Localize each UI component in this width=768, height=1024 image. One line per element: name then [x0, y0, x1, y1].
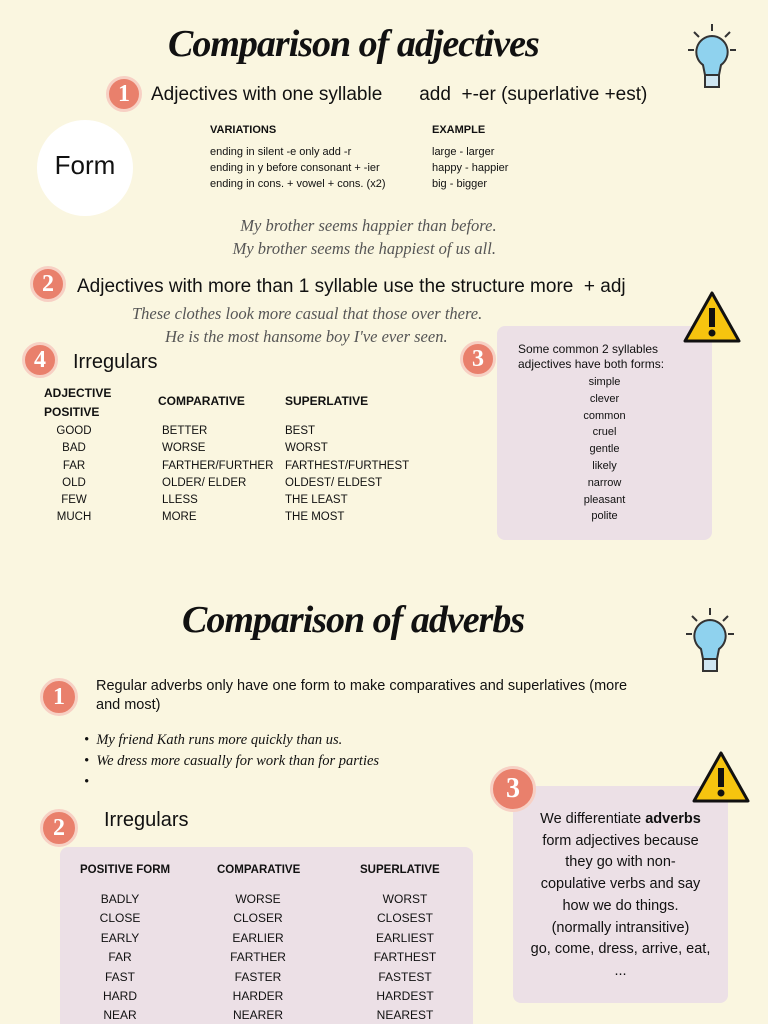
panel: adverbs vs adjectives: form adjectives because — [542, 833, 699, 849]
panel: irregular adverbs table: FARTHEST — [374, 950, 436, 964]
badge adverbs 2 — [40, 809, 78, 847]
table: irregular adjectives: WORSE — [162, 442, 205, 454]
icon: lightbulb 2 — [686, 608, 734, 672]
panel: irregular adverbs table: NEAR — [103, 1008, 137, 1022]
badge adverbs 1: 1 — [53, 684, 65, 710]
panel: irregular adverbs table: HARD — [103, 989, 137, 1003]
panel: two-syllable adjectives: likely — [592, 460, 617, 472]
table: irregular adjectives: THE MOST — [285, 511, 344, 523]
panel: two-syllable adjectives — [497, 326, 712, 540]
panel: irregular adverbs table: FASTER — [235, 970, 281, 984]
table: irregular adjectives — [44, 386, 409, 523]
panel: irregular adverbs table: CLOSE — [100, 911, 140, 925]
panel: irregular adverbs table: BADLY — [101, 892, 139, 906]
table: example: EXAMPLE — [432, 124, 485, 136]
panel: adverbs vs adjectives: how we do things. — [562, 898, 679, 914]
panel: two-syllable adjectives: Some common 2 syllables — [518, 342, 658, 356]
panel: adverbs vs adjectives — [513, 786, 728, 1003]
example list: adverbs — [84, 732, 379, 790]
badge 2 — [30, 266, 66, 302]
panel: two-syllable adjectives: pleasant — [584, 494, 625, 506]
table: irregular adjectives: GOOD — [56, 425, 92, 437]
badge adverbs 1 — [40, 678, 78, 716]
panel: adverbs vs adjectives: they go with non- — [565, 854, 676, 870]
badge 1 — [106, 76, 142, 112]
panel: adverbs vs adjectives: We differentiate adverbs — [540, 811, 701, 827]
table: variations: ending in y before consonant + -ier — [210, 162, 380, 174]
example list: adverbs: • My friend Kath runs more quickly than us. — [84, 732, 342, 748]
table: irregular adjectives: MORE — [162, 511, 196, 523]
panel: two-syllable adjectives: common — [583, 410, 626, 422]
example sentences 1: My brother seems the happiest of us all. — [233, 239, 496, 258]
badge 2: 2 — [42, 271, 54, 297]
table: irregular adjectives: OLD — [62, 477, 86, 489]
panel: two-syllable adjectives: adjectives have both forms: — [518, 357, 664, 371]
panel: irregular adverbs table: EARLIER — [232, 931, 284, 945]
badge 1: 1 — [118, 81, 130, 107]
panel: irregular adverbs table: POSITIVE FORM — [80, 864, 170, 876]
table: irregular adjectives: THE LEAST — [285, 494, 348, 506]
table: irregular adjectives: FEW — [61, 494, 87, 506]
panel: irregular adverbs table: FAST — [105, 970, 135, 984]
text: regular adverbs: Regular adverbs only have one form to make comparatives and superlatives (more — [96, 678, 627, 694]
panel: adverbs vs adjectives: (normally intransitive) — [552, 920, 689, 936]
panel: two-syllable adjectives: polite — [591, 510, 618, 522]
example list: adverbs: • — [84, 774, 89, 790]
panel: irregular adverbs table: HARDER — [233, 989, 283, 1003]
badge adverbs 3: 3 — [506, 773, 520, 804]
example sentences 2 — [132, 304, 482, 346]
example sentences 2: He is the most hansome boy I've ever seen. — [165, 327, 448, 346]
table: irregular adjectives: OLDER/ ELDER — [162, 477, 246, 489]
panel: irregular adverbs table: FASTEST — [378, 970, 432, 984]
badge adverbs 2: 2 — [53, 815, 65, 841]
panel: irregular adverbs table: FARTHER — [230, 950, 286, 964]
table: irregular adjectives: BETTER — [162, 425, 207, 437]
example sentences 1 — [232, 216, 497, 258]
table: irregular adjectives: MUCH — [57, 511, 91, 523]
panel: two-syllable adjectives: gentle — [590, 443, 619, 455]
table: irregular adjectives: BAD — [62, 442, 86, 454]
panel: irregular adverbs table: WORSE — [235, 892, 281, 906]
panel: adverbs vs adjectives: copulative verbs and say — [541, 876, 700, 892]
panel: two-syllable adjectives: simple — [589, 376, 620, 388]
table: irregular adjectives: LLESS — [162, 494, 198, 506]
icon: warning 2 — [692, 751, 750, 802]
heading: adverb irregulars: Irregulars — [104, 809, 188, 831]
badge 3 — [460, 341, 496, 377]
text: regular adverbs — [96, 678, 627, 713]
heading: irregulars: Irregulars — [73, 351, 157, 373]
badge 4 — [22, 342, 58, 378]
panel: irregular adverbs table: EARLIEST — [376, 931, 434, 945]
heading: more than 1 syllable: Adjectives with more than 1 syllable use the structure more + adj — [77, 276, 626, 297]
panel: two-syllable adjectives: clever — [590, 393, 619, 405]
panel: irregular adverbs table: WORST — [383, 892, 427, 906]
badge 4: 4 — [34, 347, 46, 373]
table: example: happy - happier — [432, 162, 508, 174]
panel: adverbs vs adjectives: go, come, dress, arrive, eat, — [531, 941, 710, 957]
panel: irregular adverbs table: COMPARATIVE — [217, 864, 300, 876]
table: example: big - bigger — [432, 178, 487, 190]
table: irregular adjectives: ADJECTIVE — [44, 386, 111, 400]
heading: one syllable: Adjectives with one syllable add +-er (superlative +est) — [151, 84, 647, 105]
panel: irregular adverbs table: NEARER — [233, 1008, 283, 1022]
panel: irregular adverbs table — [60, 847, 473, 1024]
panel: irregular adverbs table: EARLY — [101, 931, 139, 945]
table: variations: VARIATIONS — [210, 124, 276, 136]
panel: two-syllable adjectives: cruel — [593, 426, 616, 438]
panel: adverbs vs adjectives: ... — [614, 963, 627, 979]
table: irregular adjectives: FAR — [63, 460, 85, 472]
table: irregular adjectives: OLDEST/ ELDEST — [285, 477, 382, 489]
example list: adverbs: • We dress more casually for work than for parties — [84, 753, 379, 769]
table: irregular adjectives: FARTHER/FURTHER — [162, 460, 273, 472]
panel: irregular adverbs table: CLOSEST — [377, 911, 433, 925]
text: regular adverbs: and most) — [96, 697, 160, 713]
panel: irregular adverbs table: FAR — [108, 950, 132, 964]
title: comparison of adjectives: Comparison of adjectives — [168, 23, 539, 65]
badge 3: 3 — [472, 346, 484, 372]
table: irregular adjectives: POSITIVE — [44, 405, 99, 419]
panel: irregular adverbs table: NEAREST — [377, 1008, 433, 1022]
example sentences 2: These clothes look more casual that those over there. — [132, 304, 482, 323]
icon: warning 1 — [684, 291, 741, 342]
badge adverbs 3 — [490, 766, 536, 812]
table: variations: ending in cons. + vowel + cons. (x2) — [210, 178, 385, 190]
table: irregular adjectives: BEST — [285, 425, 315, 437]
title: comparison of adverbs: Comparison of adverbs — [182, 599, 524, 641]
panel: irregular adverbs table: SUPERLATIVE — [360, 864, 440, 876]
circle: Form — [37, 120, 133, 216]
table: irregular adjectives: FARTHEST/FURTHEST — [285, 460, 409, 472]
table: variations — [210, 124, 385, 190]
table: irregular adjectives: WORST — [285, 442, 328, 454]
example sentences 1: My brother seems happier than before. — [240, 216, 497, 235]
table: example — [432, 124, 508, 190]
table: irregular adjectives: COMPARATIVE — [158, 394, 245, 408]
panel: irregular adverbs table: HARDEST — [376, 989, 434, 1003]
table: variations: ending in silent -e only add -r — [210, 146, 351, 158]
panel: irregular adverbs table: CLOSER — [233, 911, 283, 925]
table: irregular adjectives: SUPERLATIVE — [285, 394, 368, 408]
panel: two-syllable adjectives: narrow — [588, 477, 621, 489]
table: example: large - larger — [432, 146, 494, 158]
icon: lightbulb 1 — [688, 24, 736, 88]
circle: Form: Form — [55, 150, 115, 180]
